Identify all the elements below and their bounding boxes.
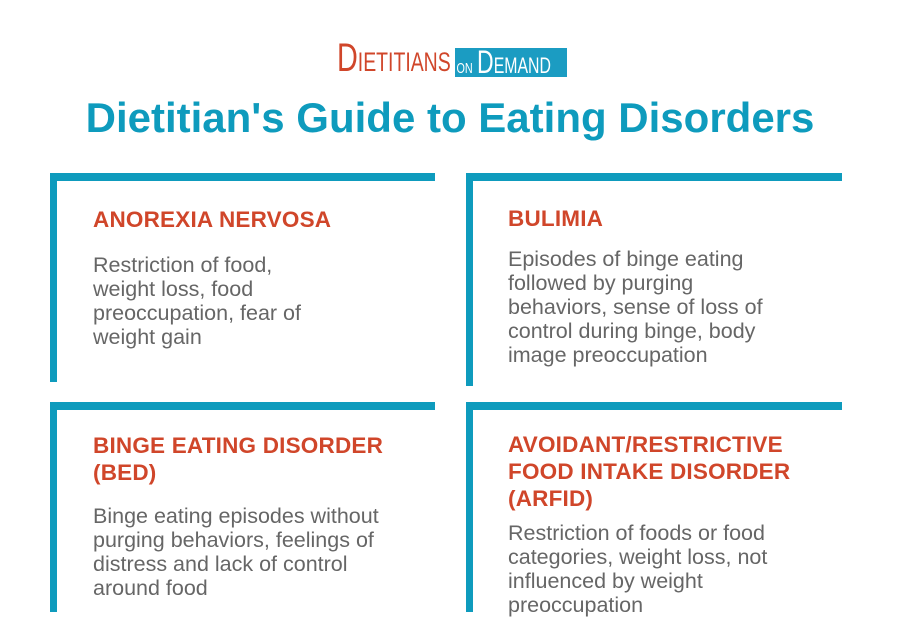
text: Binge eating episodes without <box>93 504 379 528</box>
text: image preoccupation <box>508 343 708 367</box>
text: preoccupation, fear of <box>93 301 301 325</box>
text: behaviors, sense of loss of <box>508 295 763 319</box>
text: weight gain <box>93 325 202 349</box>
text: purging behaviors, feelings of <box>93 528 374 552</box>
text <box>508 247 763 367</box>
text: distress and lack of control <box>93 552 348 576</box>
text <box>508 521 768 617</box>
text: Episodes of binge eating <box>508 247 743 271</box>
logo <box>337 36 567 80</box>
text: Restriction of foods or food <box>508 521 765 545</box>
heading <box>93 433 383 485</box>
text: control during binge, body <box>508 319 755 343</box>
panel: BED <box>50 402 435 612</box>
heading: BINGE EATING DISORDER <box>93 433 383 458</box>
title: Dietitian's Guide to Eating Disorders <box>86 94 814 141</box>
heading: FOOD INTAKE DISORDER <box>508 459 790 484</box>
text: preoccupation <box>508 593 643 617</box>
text: followed by purging <box>508 271 693 295</box>
text: categories, weight loss, not <box>508 545 767 569</box>
text: influenced by weight <box>508 569 703 593</box>
logo: dietitians: DIETITIANS <box>337 36 451 80</box>
text: Restriction of food, <box>93 253 272 277</box>
heading: (ARFID) <box>508 486 593 511</box>
text <box>93 253 301 349</box>
panel: anorexia <box>50 173 435 382</box>
panel: bulimia <box>466 173 842 386</box>
heading: (BED) <box>93 460 156 485</box>
heading: AVOIDANT/RESTRICTIVE <box>508 432 783 457</box>
text: around food <box>93 576 208 600</box>
heading: ANOREXIA NERVOSA <box>93 207 331 232</box>
heading <box>508 432 790 511</box>
text <box>93 504 379 600</box>
heading: BULIMIA <box>508 206 603 231</box>
panel: ARFID <box>466 402 842 612</box>
text: weight loss, food <box>93 277 253 301</box>
